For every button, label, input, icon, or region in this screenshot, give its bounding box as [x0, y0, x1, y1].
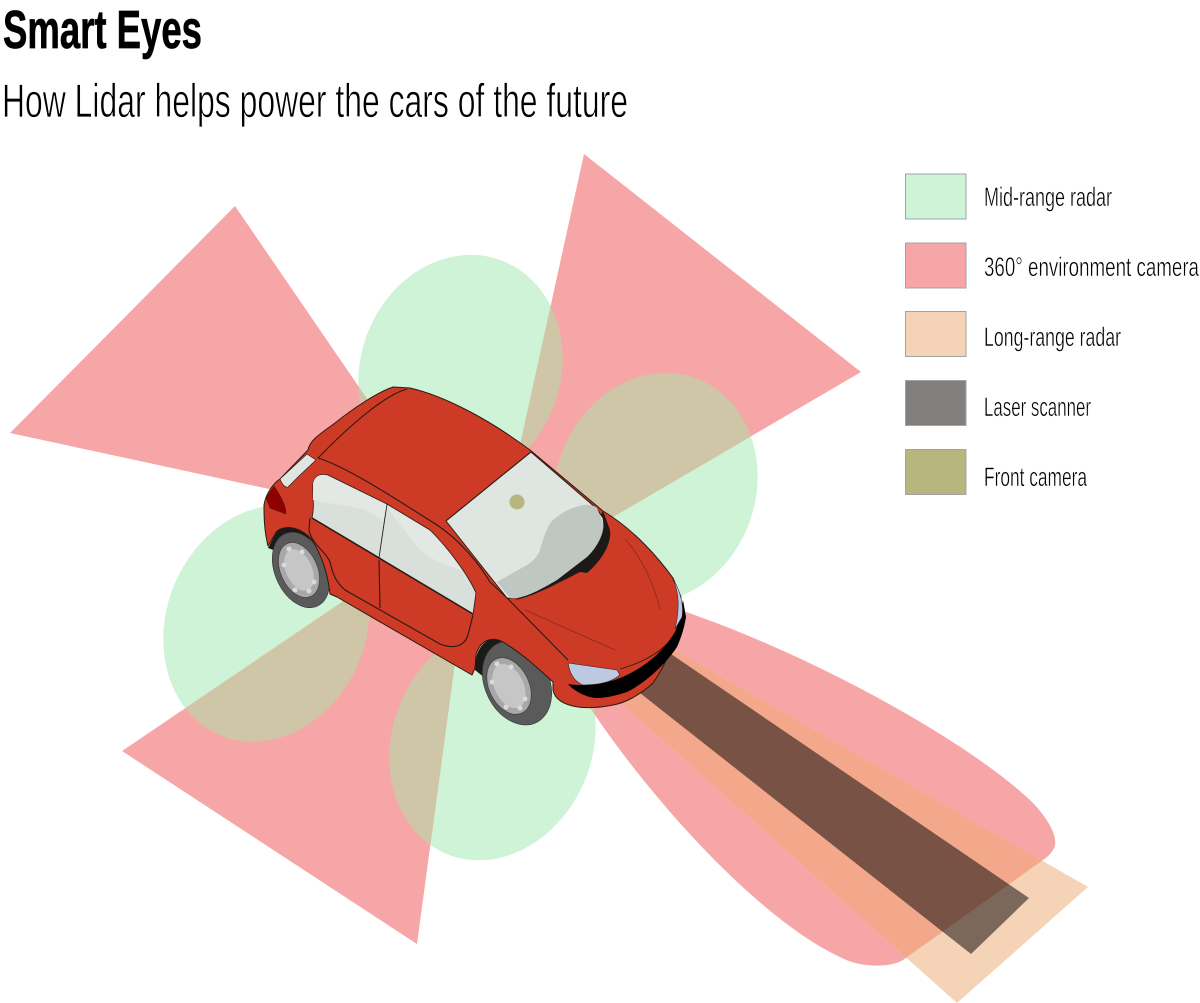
car illustration — [261, 387, 686, 737]
long-range radar overlap with camera lobe — [622, 650, 1042, 958]
subtitle: How Lidar helps power the cars of the future — [2, 74, 628, 127]
camera and radar overlaps — [186, 306, 1020, 942]
legend — [906, 174, 1200, 494]
legend: mid-range radar — [906, 174, 1112, 219]
hood creases — [525, 539, 660, 650]
legend: front camera — [906, 450, 1088, 494]
left headlight — [568, 663, 620, 685]
legend: front camera: Front camera — [984, 462, 1088, 492]
legend: long-range radar: Long-range radar — [984, 322, 1121, 352]
hood front line — [620, 632, 677, 669]
laser overlap with camera lobe — [640, 654, 1009, 932]
long-range radar beam — [612, 650, 1088, 1003]
tail light — [266, 486, 286, 514]
car body — [264, 387, 681, 708]
legend: laser scanner: Laser scanner — [984, 392, 1091, 422]
rear side window — [312, 474, 387, 558]
lower door lines — [309, 518, 473, 647]
legend: 360 environment camera — [906, 243, 1200, 288]
legend: mid-range radar: Mid-range radar — [984, 182, 1112, 212]
title: Smart Eyes — [3, 0, 202, 60]
rear window — [280, 454, 316, 487]
rear wheel — [261, 523, 341, 617]
right headlight — [673, 579, 683, 629]
black front bumper — [568, 600, 686, 698]
windshield reflection — [497, 505, 603, 598]
front side window — [379, 504, 476, 614]
windshield wiper shadow — [515, 511, 610, 600]
360 environment camera cones — [10, 154, 1055, 966]
roof lines — [318, 389, 568, 660]
belt line — [312, 518, 473, 614]
laser scanner beam — [630, 650, 1029, 954]
windshield — [446, 452, 604, 598]
front camera position marker — [510, 494, 524, 510]
legend: long-range radar — [906, 312, 1121, 356]
front wheel — [469, 629, 565, 737]
legend: laser scanner — [906, 380, 1091, 426]
mid-range radar zones — [128, 226, 789, 892]
sensor coverage diagram — [10, 154, 1088, 1003]
